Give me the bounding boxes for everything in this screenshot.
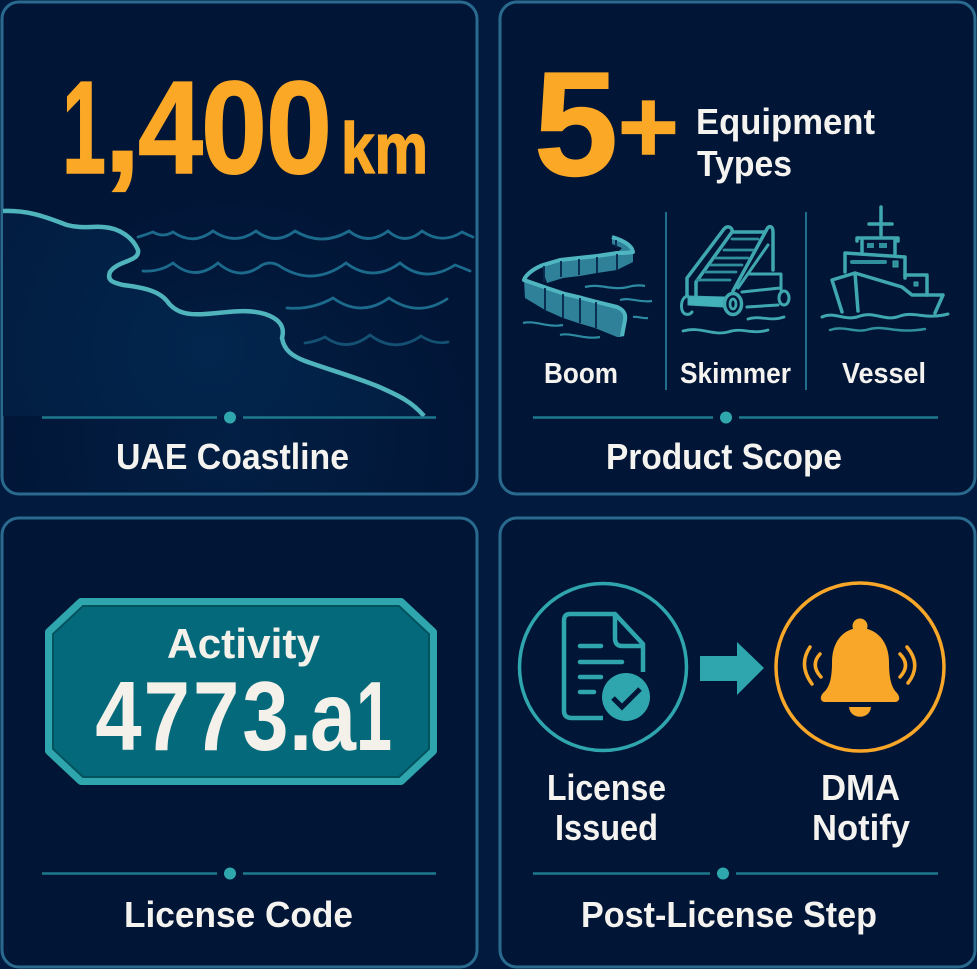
panel: product scope	[500, 2, 975, 494]
headline: 5+: +	[618, 69, 679, 185]
label: License Code: License Code	[124, 894, 353, 935]
divider with dot	[42, 868, 436, 880]
label: Post-License Step: Post-License Step	[581, 894, 877, 935]
badge: Activity 4773.a1	[49, 602, 433, 781]
panel: UAE coastline	[2, 2, 477, 494]
badge: Activity 4773.a1: Activity	[167, 620, 321, 667]
label: Equipment Types: Types	[697, 143, 792, 184]
label: License Issued: Issued	[555, 807, 658, 848]
column separators	[666, 212, 806, 390]
headline: 5+: 5	[534, 42, 618, 207]
icon: license document	[520, 584, 686, 750]
label: UAE Coastline: UAE Coastline	[116, 436, 349, 477]
panel: license code	[2, 518, 477, 967]
label: DMA Notify: DMA	[821, 767, 900, 808]
label: Product Scope: Product Scope	[606, 436, 842, 477]
icon: bell	[776, 583, 944, 751]
badge: Activity 4773.a1: 1	[356, 661, 392, 771]
headline: 1,400 km	[62, 52, 428, 201]
ocean waves	[138, 231, 473, 345]
arrow	[700, 642, 764, 695]
label: License Issued: License	[547, 767, 666, 808]
headline: 5+	[534, 42, 679, 207]
icon: vessel	[822, 207, 948, 331]
icon: boom	[523, 237, 652, 338]
land area and coastline	[3, 211, 424, 416]
label: DMA Notify: Notify	[812, 807, 910, 848]
headline: 1,400 km: 4	[138, 54, 203, 201]
headline: 1,400 km: km	[341, 110, 428, 189]
equipment labels: Boom	[544, 358, 618, 390]
divider with dot	[533, 412, 938, 424]
label: License Issued	[547, 767, 666, 848]
divider with dot	[42, 412, 436, 424]
divider with dot	[533, 868, 938, 880]
icon: skimmer	[682, 227, 789, 333]
equipment labels	[544, 358, 926, 390]
equipment labels: Vessel	[842, 358, 926, 390]
headline: 1,400 km: 0	[201, 54, 267, 201]
label: DMA Notify	[812, 767, 910, 848]
equipment labels: Skimmer	[680, 358, 791, 390]
headline: 1,400 km: ,	[104, 52, 141, 199]
panel: post-license step	[500, 518, 975, 967]
headline: 1,400 km: 1	[62, 54, 106, 201]
label: Equipment Types	[696, 101, 875, 184]
badge: Activity 4773.a1: a	[310, 661, 357, 771]
headline: 1,400 km: 0	[266, 54, 332, 201]
label: Equipment Types: Equipment	[696, 101, 875, 142]
badge: Activity 4773.a1: 4773.	[95, 663, 312, 772]
